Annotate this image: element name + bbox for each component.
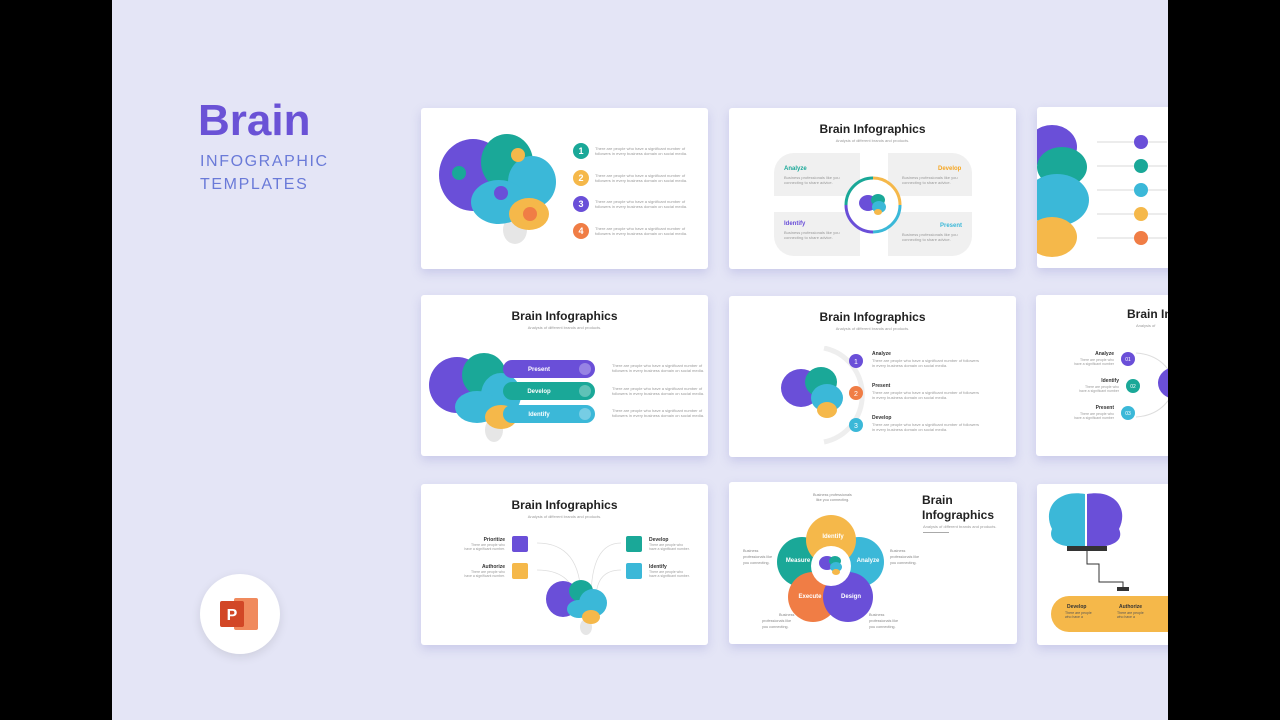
card: brain with four icons: Brain Infographics bbox=[511, 498, 618, 512]
card: partial numbered: There are people who bbox=[1080, 358, 1114, 362]
bars: Develop bbox=[527, 389, 551, 395]
list: numbered points: There are people who have a significant number of followers in every business domain on social media. bbox=[595, 199, 687, 209]
quadrants: Business professionals like you connecting to share advice. bbox=[784, 230, 840, 240]
card: brain with arc list: 3 bbox=[854, 423, 858, 430]
list: numbered points: There are people who have a significant number of followers in every business domain on social media. bbox=[595, 226, 687, 236]
card: split brain with bar: Develop bbox=[1067, 604, 1086, 610]
card: brain with four icons: have a significant number. bbox=[464, 574, 505, 578]
card: partial numbered: Analysis of bbox=[1136, 323, 1155, 328]
card: flower cycle: Brain bbox=[922, 493, 953, 507]
card: split brain with bar: There are people bbox=[1065, 611, 1092, 615]
card: brain with arc list: Present bbox=[872, 383, 890, 389]
card: brain with bars bbox=[421, 295, 708, 456]
title: Brain: Brain bbox=[198, 96, 310, 145]
list: numbered points: 2 bbox=[578, 173, 584, 183]
card: flower cycle: you connecting. bbox=[869, 625, 896, 629]
card: flower cycle: Infographics bbox=[922, 508, 994, 522]
card: flower cycle: Business bbox=[743, 549, 759, 553]
card: partial numbered: 02 bbox=[1130, 384, 1136, 390]
card: partial numbered: Present bbox=[1096, 405, 1114, 411]
card: split brain with bar bbox=[1037, 484, 1182, 645]
quadrants: Analyze bbox=[784, 166, 807, 172]
card: partial numbered: have a significant number bbox=[1074, 416, 1115, 420]
card: brain with four icons: There are people who bbox=[649, 543, 683, 547]
card: flower cycle: professionals like bbox=[890, 555, 919, 559]
card: partial numbered: There are people who bbox=[1080, 412, 1114, 416]
quadrants: Identify bbox=[784, 221, 805, 227]
card: brain with four icons bbox=[421, 484, 708, 645]
card: flower cycle: Analysis of different brands and products. bbox=[923, 524, 997, 529]
card: split brain with bar: who have a bbox=[1065, 615, 1083, 619]
icon list bbox=[1097, 135, 1167, 245]
list: numbered points: 3 bbox=[578, 199, 584, 209]
list: numbered points: There are people who have a significant number of followers in every business domain on social media. bbox=[595, 146, 687, 156]
card: brain with four icons: Develop bbox=[649, 537, 668, 543]
card: flower cycle: Business bbox=[890, 549, 906, 553]
card: brain with four icons: have a significant number. bbox=[464, 547, 505, 551]
card: brain with arc list: There are people who have a significant number of followers in every business domain on social media. bbox=[872, 390, 979, 400]
card: brain with four icons: Authorize bbox=[482, 564, 505, 570]
bars: Present bbox=[528, 367, 550, 373]
card: split brain with bar: Authorize bbox=[1119, 604, 1142, 610]
card: brain with bars: There are people who have a significant number of followers in every business domain on social media. bbox=[612, 386, 704, 396]
brain bbox=[439, 134, 556, 244]
card: flower cycle: Measure bbox=[786, 558, 811, 564]
card: brain with four icons: There are people who bbox=[649, 570, 683, 574]
bars: Identify bbox=[528, 412, 550, 418]
card: brain with arc list: 2 bbox=[854, 391, 858, 398]
card: brain with arc list: 1 bbox=[854, 359, 858, 366]
list: numbered points bbox=[573, 143, 687, 239]
quadrants: Business professionals like you connecting to share advice. bbox=[902, 232, 958, 242]
card: brain with four icons: There are people who bbox=[471, 570, 505, 574]
card: brain with four icons: have a significant number. bbox=[649, 547, 690, 551]
card: brain with arc list: Analyze bbox=[872, 351, 891, 357]
card: flower cycle bbox=[729, 482, 1017, 644]
list: numbered points: There are people who have a significant number of followers in every business domain on social media. bbox=[595, 173, 687, 183]
card: numbered brain bbox=[421, 108, 708, 269]
quadrants: Business professionals like you connecting to share advice. bbox=[902, 175, 958, 185]
card: flower cycle: Design bbox=[841, 594, 861, 600]
card: flower cycle: you connecting. bbox=[762, 625, 789, 629]
card: brain with four icons: Identify bbox=[649, 564, 667, 570]
subtitle: infographic templates bbox=[200, 153, 329, 193]
bars bbox=[503, 360, 595, 423]
card: flower cycle: you connecting. bbox=[890, 561, 917, 565]
card: brain with four icons: have a significant number. bbox=[649, 574, 690, 578]
card: brain with arc list bbox=[729, 296, 1016, 457]
card: brain with arc list: Develop bbox=[872, 415, 891, 421]
card: partial numbered: Analyze bbox=[1095, 351, 1114, 357]
card: flower cycle: Business bbox=[869, 613, 885, 617]
card: brain with arc list: There are people who have a significant number of followers in every business domain on social media. bbox=[872, 358, 979, 368]
card: brain with bars: Brain Infographics bbox=[511, 309, 618, 323]
subtitle: infographic templates: TEMPLATES bbox=[200, 176, 308, 193]
card: split brain with bar: There are people bbox=[1117, 611, 1144, 615]
card: four quadrants: Brain Infographics bbox=[819, 122, 926, 136]
icon: powerpoint bbox=[200, 574, 280, 654]
card: partial numbered: have a significant number bbox=[1079, 389, 1120, 393]
card: brain with four icons: Analysis of different brands and products. bbox=[528, 514, 601, 519]
card: flower cycle: professionals like bbox=[743, 555, 772, 559]
card: flower cycle: Identify bbox=[822, 534, 844, 540]
card: brain with bars: There are people who have a significant number of followers in every business domain on social media. bbox=[612, 408, 704, 418]
card: flower cycle: Business bbox=[779, 613, 795, 617]
quadrants: Business professionals like you connecting to share advice. bbox=[784, 175, 840, 185]
card: brain with arc list: Analysis of different brands and products. bbox=[836, 326, 909, 331]
card: four quadrants: Analysis of different brands and products. bbox=[836, 138, 909, 143]
card: flower cycle: Execute bbox=[798, 594, 822, 600]
brain half bbox=[1037, 125, 1089, 257]
quadrants bbox=[774, 153, 972, 256]
icon: powerpoint: P bbox=[227, 607, 238, 624]
list: numbered points: 4 bbox=[578, 226, 584, 236]
card: four quadrants bbox=[729, 108, 1016, 269]
card: flower cycle: like you connecting. bbox=[816, 498, 849, 502]
card: partial numbered: Identify bbox=[1101, 378, 1119, 384]
card: split brain with bar: who have a bbox=[1117, 615, 1135, 619]
card: brain with arc list: There are people who have a significant number of followers in every business domain on social media. bbox=[872, 422, 979, 432]
card: flower cycle: professionals like bbox=[869, 619, 898, 623]
card: partial list with brain bbox=[1037, 107, 1182, 268]
card: brain with bars: There are people who have a significant number of followers in every business domain on social media. bbox=[612, 363, 704, 373]
quadrants: Present bbox=[940, 223, 962, 229]
card: partial numbered: have a significant number bbox=[1074, 362, 1115, 366]
card: brain with arc list: Brain Infographics bbox=[819, 310, 926, 324]
card: flower cycle: professionals like bbox=[762, 619, 791, 623]
card: flower cycle: Business professionals bbox=[813, 493, 852, 497]
list: numbered points: 1 bbox=[578, 146, 584, 156]
card: partial numbered: There are people who bbox=[1085, 385, 1119, 389]
card: brain with four icons: Prioritize bbox=[484, 537, 505, 543]
card: partial numbered bbox=[1036, 295, 1182, 456]
card: partial numbered: 03 bbox=[1125, 411, 1131, 417]
card: brain with bars: Analysis of different brands and products. bbox=[528, 325, 601, 330]
card: flower cycle: you connecting. bbox=[743, 561, 770, 565]
quadrants: Develop bbox=[938, 166, 961, 172]
subtitle: infographic templates: INFOGRAPHIC bbox=[200, 153, 329, 170]
card: brain with four icons: There are people who bbox=[471, 543, 505, 547]
card: partial numbered: 01 bbox=[1125, 357, 1131, 363]
card: flower cycle: Analyze bbox=[857, 558, 880, 564]
